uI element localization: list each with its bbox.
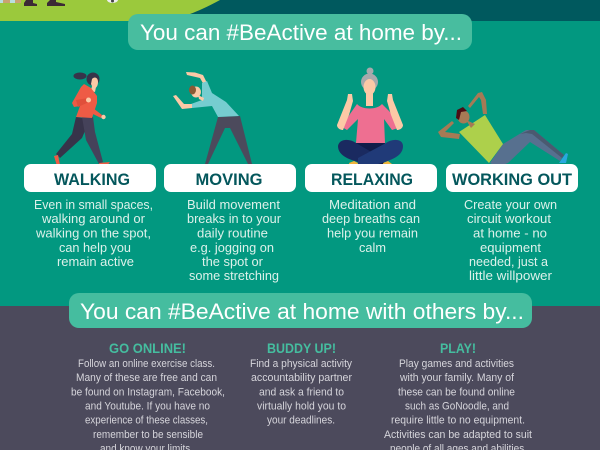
column: go online: and Youtube. If you have no	[85, 400, 210, 412]
column: play: PLAY!	[440, 341, 476, 356]
heading pill: at home	[128, 14, 472, 50]
label: moving	[164, 164, 296, 192]
text: working out description: little willpower	[469, 269, 552, 283]
column: buddy up: and ask a friend to	[259, 386, 344, 398]
figure: meditating woman	[337, 68, 403, 167]
column: go online: Many of these are free and can	[76, 372, 217, 384]
column: buddy up	[250, 341, 352, 426]
text: relaxing description: calm	[359, 241, 386, 255]
text: moving description: breaks in to your	[187, 212, 281, 226]
text: working out description: needed, just a	[469, 255, 548, 269]
label: walking	[24, 164, 156, 192]
column: go online: Follow an online exercise class.	[78, 358, 215, 370]
text: walking description: walking around or	[41, 212, 145, 226]
text: relaxing description: Meditation and	[329, 198, 416, 212]
text: walking description: walking on the spot,	[35, 226, 151, 240]
figure: stretching man	[173, 72, 254, 167]
text: moving description	[187, 198, 281, 283]
label: relaxing	[305, 164, 437, 192]
text: working out description: at home - no	[473, 226, 547, 240]
figure: walking woman	[54, 72, 110, 167]
label: working out	[446, 164, 578, 192]
text: moving description: Build movement	[187, 198, 281, 212]
top banner: hillside scene	[0, 0, 600, 21]
text: moving description: some stretching	[189, 269, 279, 283]
label: relaxing: RELAXING	[331, 170, 413, 189]
column: go online: be found on Instagram, Facebook,	[71, 386, 225, 398]
text: working out description: equipment	[480, 241, 542, 255]
text: relaxing description: deep breaths can	[322, 212, 420, 226]
column: buddy up: Find a physical activity	[250, 358, 352, 370]
text: moving description: e.g. jogging on	[190, 241, 274, 255]
column: go online: experience of these classes,	[85, 414, 208, 426]
column: buddy up: virtually hold you to	[257, 400, 346, 412]
text: relaxing description: help you remain	[327, 226, 418, 240]
column: play: Activities can be adapted to suit	[384, 429, 532, 441]
column: play: these can be found online	[398, 386, 515, 398]
figure: sit-ups man	[438, 92, 568, 167]
column: buddy up: BUDDY UP!	[267, 341, 336, 356]
heading pill: with others	[69, 293, 532, 328]
column: go online: GO ONLINE!	[109, 341, 186, 356]
column: play: such as GoNoodle, and	[405, 400, 509, 412]
label: moving: MOVING	[196, 170, 262, 189]
column: buddy up: accountability partner	[251, 372, 352, 384]
column: play: require little to no equipment.	[391, 414, 525, 426]
heading pill: at home: You can #BeActive at home by...	[140, 20, 462, 45]
text: walking description: remain active	[57, 255, 134, 269]
column: play	[384, 341, 532, 450]
text: relaxing description	[322, 198, 420, 255]
heading pill: with others: You can #BeActive at home with others by...	[80, 299, 524, 324]
text: working out description: Create your own	[464, 198, 557, 212]
column: buddy up: your deadlines.	[267, 414, 335, 426]
text: walking description	[34, 198, 153, 269]
text: working out description	[464, 198, 557, 283]
text: working out description: circuit workout	[467, 212, 552, 226]
label: working out: WORKING OUT	[452, 170, 573, 189]
column: play: with your family. Many of	[399, 372, 515, 384]
text: moving description: daily routine	[197, 226, 268, 240]
column: go online: remember to be sensible	[93, 429, 203, 441]
label: walking: WALKING	[54, 170, 130, 189]
text: walking description: Even in small spaces,	[34, 198, 153, 212]
text: walking description: can help you	[59, 241, 131, 255]
column: play: Play games and activities	[399, 358, 514, 370]
section background: with others	[0, 306, 600, 450]
column: go online	[71, 341, 225, 450]
text: moving description: the spot or	[202, 255, 263, 269]
